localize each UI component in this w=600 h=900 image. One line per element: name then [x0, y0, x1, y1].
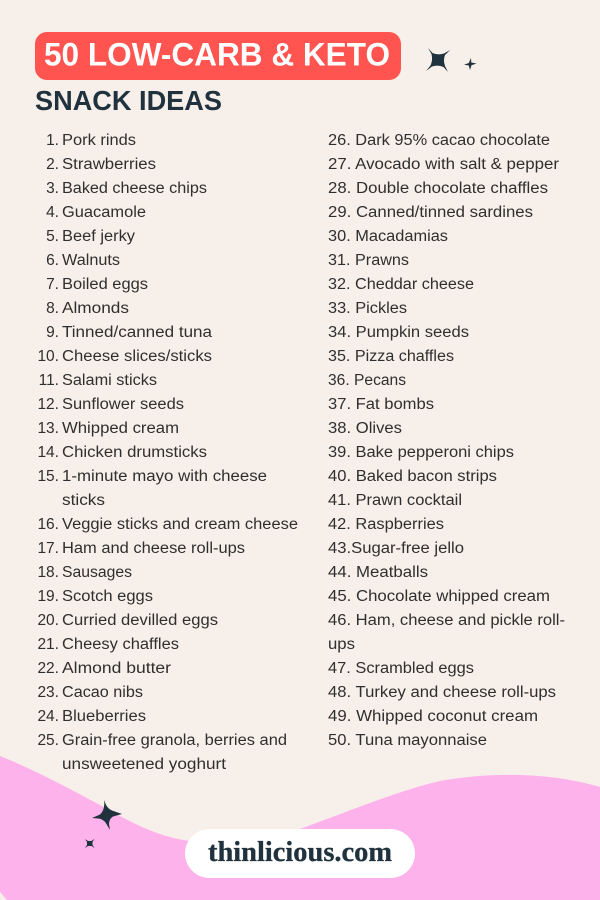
list: left column: Pork rinds [62, 132, 136, 149]
list: right column: 28. Double chocolate chaffles [328, 180, 548, 197]
list: right column: 43.Sugar-free jello [328, 540, 464, 557]
list: right column: 31. Prawns [328, 252, 409, 269]
list: left column: Cheese slices/sticks [62, 348, 212, 365]
list: left column: 17. [37, 540, 59, 557]
list: left column [37, 132, 298, 773]
list: left column: 16. [37, 516, 59, 533]
icon: sparkle large top [426, 48, 450, 72]
list: left column: 14. [37, 444, 59, 461]
list: right column: ups [328, 636, 355, 653]
list: left column: Veggie sticks and cream cheese [62, 516, 298, 533]
list: left column: 24. [37, 708, 59, 725]
list: left column: 9. [46, 324, 59, 341]
list: left column: Beef jerky [62, 228, 135, 245]
list: left column: Curried devilled eggs [62, 612, 218, 629]
list: left column: 2. [46, 156, 59, 173]
list: right column: 37. Fat bombs [328, 396, 434, 413]
list: left column: 10. [37, 348, 59, 365]
list: right column: 40. Baked bacon strips [328, 468, 497, 485]
list: left column: unsweetened yoghurt [62, 756, 227, 773]
list: right column: 38. Olives [328, 420, 402, 437]
list: left column: Almonds [62, 300, 129, 317]
icon: sparkle small top [464, 58, 476, 70]
list: left column: Almond butter [62, 660, 171, 677]
list: left column: Baked cheese chips [62, 180, 207, 197]
list: left column: Tinned/canned tuna [62, 324, 212, 341]
list: left column: 22. [37, 660, 59, 677]
list: right column: 34. Pumpkin seeds [328, 324, 469, 341]
list: left column: Scotch eggs [62, 588, 153, 605]
list: left column: sticks [62, 492, 105, 509]
list: left column: 1. [46, 132, 59, 149]
list: left column: Guacamole [62, 204, 146, 221]
logo pill: thinlicious.com [208, 837, 392, 868]
list: right column: 33. Pickles [328, 300, 407, 317]
list: right column: 32. Cheddar cheese [328, 276, 474, 293]
list: right column: 36. Pecans [328, 372, 406, 389]
list: left column: 1-minute mayo with cheese [62, 468, 267, 485]
list: right column: 45. Chocolate whipped cream [328, 588, 550, 605]
list: right column: 42. Raspberries [328, 516, 444, 533]
list: left column: Walnuts [62, 252, 120, 269]
list: left column: 15. [37, 468, 59, 485]
list: left column: 19. [37, 588, 59, 605]
icon: sparkle small bottom [85, 839, 94, 848]
list: right column: 26. Dark 95% cacao chocolate [328, 132, 550, 149]
list: left column: 20. [37, 612, 59, 629]
list: left column: 12. [37, 396, 59, 413]
list: left column: 23. [37, 684, 59, 701]
list: left column: 13. [37, 420, 59, 437]
list: left column: 11. [39, 372, 59, 389]
list: right column: 50. Tuna mayonnaise [328, 732, 487, 749]
list: left column: Strawberries [62, 156, 156, 173]
list: right column: 49. Whipped coconut cream [328, 708, 538, 725]
list: left column: Grain-free granola, berries and [62, 732, 287, 749]
list: right column: 47. Scrambled eggs [328, 660, 474, 677]
list: left column: 3. [46, 180, 59, 197]
list: right column: 27. Avocado with salt & pepper [328, 156, 559, 173]
list: right column: 44. Meatballs [328, 564, 428, 581]
list: left column: 7. [46, 276, 59, 293]
list: left column: Whipped cream [62, 420, 179, 437]
list: left column: Cacao nibs [62, 684, 143, 701]
list: left column: 8. [46, 300, 59, 317]
list: right column: 46. Ham, cheese and pickle roll- [328, 612, 565, 629]
list: right column [328, 132, 565, 749]
title banner: 50 LOW-CARB & KETO [44, 36, 390, 72]
subtitle: SNACK IDEAS [35, 85, 222, 116]
logo pill [185, 829, 415, 878]
list: right column: 48. Turkey and cheese roll-ups [328, 684, 556, 701]
icon: sparkle large bottom [92, 800, 122, 830]
pink wave background [0, 756, 600, 900]
list: left column: Sausages [62, 564, 132, 581]
list: left column: Cheesy chaffles [62, 636, 179, 653]
list: left column: 5. [46, 228, 59, 245]
list: right column: 39. Bake pepperoni chips [328, 444, 514, 461]
list: left column: Chicken drumsticks [62, 444, 207, 461]
list: left column: 18. [37, 564, 59, 581]
list: left column: Sunflower seeds [62, 396, 184, 413]
list: left column: Boiled eggs [62, 276, 148, 293]
list: left column: Ham and cheese roll-ups [62, 540, 245, 557]
list: right column: 30. Macadamias [328, 228, 448, 245]
list: right column: 29. Canned/tinned sardines [328, 204, 533, 221]
list: left column: Blueberries [62, 708, 146, 725]
list: right column: 35. Pizza chaffles [328, 348, 454, 365]
list: left column: Salami sticks [62, 372, 157, 389]
list: left column: 21. [37, 636, 59, 653]
list: left column: 25. [37, 732, 59, 749]
list: left column: 4. [46, 204, 59, 221]
list: right column: 41. Prawn cocktail [328, 492, 462, 509]
list: left column: 6. [46, 252, 59, 269]
